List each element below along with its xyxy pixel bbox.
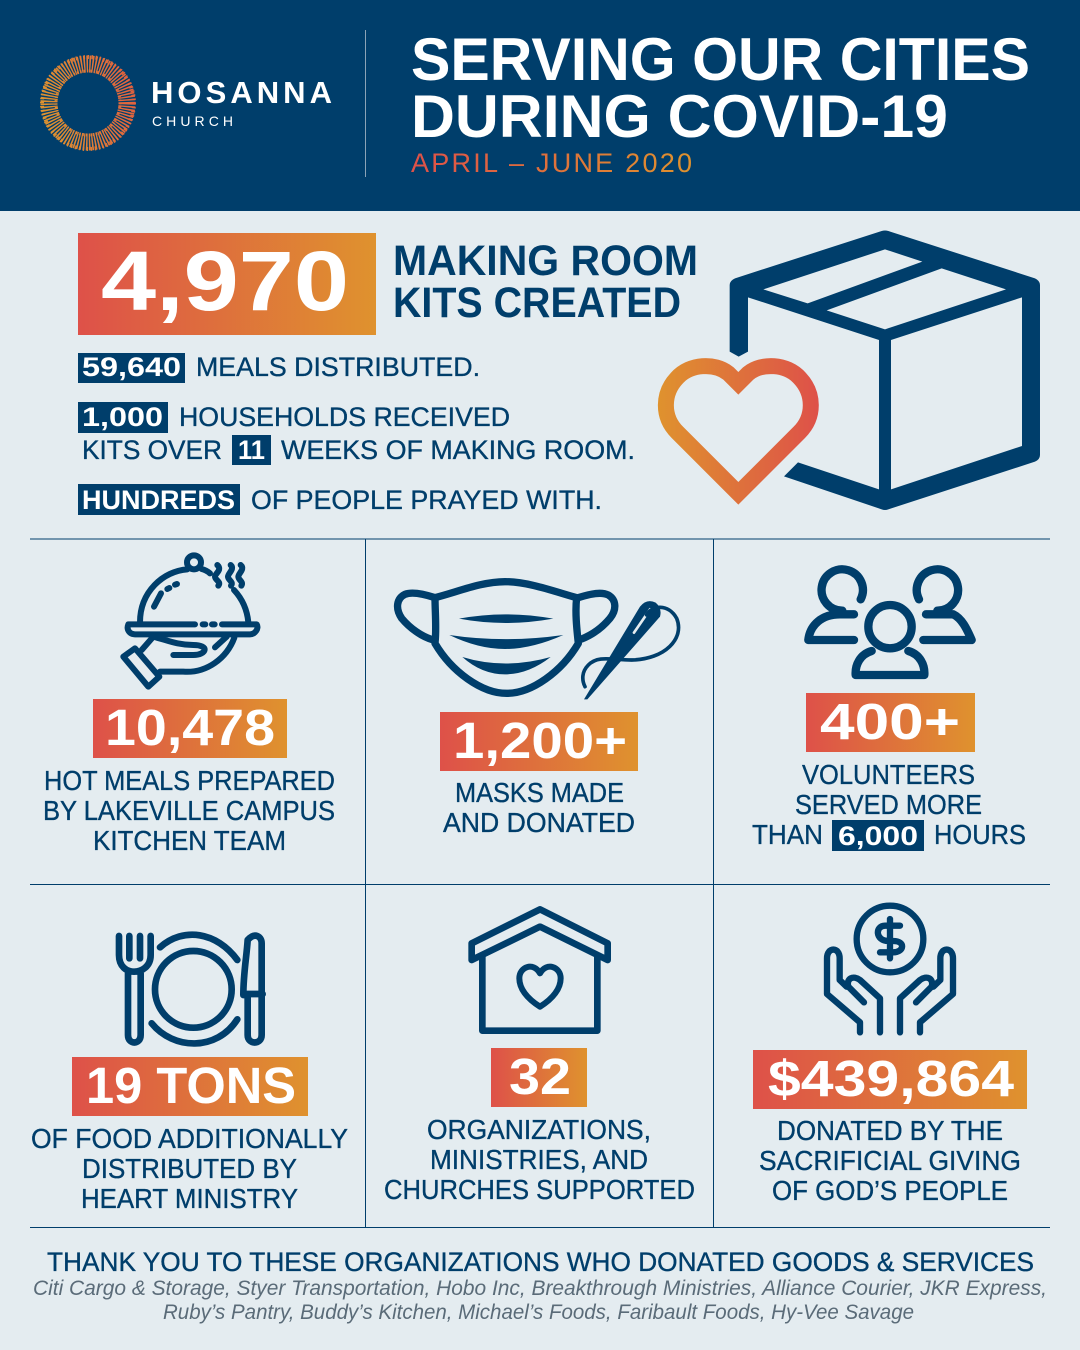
logo: Hosanna Church: HOSANNA	[151, 75, 332, 110]
text: donated by sacrificial giving: OF GOD’S PEOPLE	[772, 1175, 1008, 1206]
stat: 10,478: 10,478	[105, 699, 275, 756]
text: volunteers served hours: SERVED MORE	[795, 789, 982, 820]
heading: thank you: THANK YOU TO THESE ORGANIZATIONS WHO DONATED GOODS & SERVICES	[47, 1247, 1034, 1277]
grid lines	[30, 539, 1050, 1228]
text: households received kits	[78, 402, 635, 465]
title: DURING COVID-19	[411, 83, 948, 150]
panel: hot meals	[43, 555, 335, 856]
logo: Hosanna Church: CHURCH	[152, 113, 233, 129]
stat: 32	[491, 1048, 587, 1107]
text: meals distributed: MEALS DISTRIBUTED.	[196, 352, 480, 382]
text: volunteers served hours: THAN	[752, 819, 823, 850]
text: people prayed with: OF PEOPLE PRAYED WITH.	[251, 485, 602, 515]
text: organizations supported: MINISTRIES, AND	[430, 1144, 648, 1175]
text: donated by sacrificial giving: SACRIFICIAL GIVING	[759, 1145, 1021, 1176]
stat: 4,970: 4,970	[101, 234, 349, 328]
text: people prayed with: HUNDREDS	[82, 485, 235, 515]
text: households received kits: KITS OVER	[82, 435, 222, 465]
text: donor list	[33, 1277, 1047, 1324]
panel: organizations	[384, 909, 695, 1205]
stat: 4,970	[78, 233, 376, 335]
text: donated by sacrificial giving	[759, 1115, 1021, 1206]
text: organizations supported: ORGANIZATIONS,	[427, 1114, 651, 1145]
panel: making room kits	[78, 230, 1040, 515]
stat: 1,200+: 1,200+	[453, 712, 627, 769]
text: volunteers served hours: VOLUNTEERS	[802, 759, 975, 790]
text: volunteers served hours: 6,000	[838, 821, 918, 851]
text: donor list: Citi Cargo & Storage, Styer Transportation, Hobo Inc, Breakthrough Ministries, Alliance Courier, JKR Express,	[33, 1277, 1047, 1300]
text: masks made and donated: AND DONATED	[443, 807, 635, 838]
text: donated by sacrificial giving: DONATED BY THE	[777, 1115, 1003, 1146]
text: hot meals prepared: KITCHEN TEAM	[93, 825, 286, 856]
panel: donations	[753, 906, 1027, 1206]
icon: serving cloche and hand	[123, 555, 257, 687]
text: households received kits: WEEKS OF MAKING ROOM.	[281, 435, 635, 465]
title: APRIL – JUNE 2020	[411, 148, 692, 178]
text: organizations supported	[384, 1114, 695, 1205]
icon: mask and needle	[398, 582, 679, 699]
stat: 19 tons: 19 TONS	[86, 1057, 296, 1114]
text: hot meals prepared: BY LAKEVILLE CAMPUS	[43, 795, 335, 826]
text: donor list: Ruby’s Pantry, Buddy’s Kitchen, Michael’s Foods, Faribault Foods, Hy-Vee Savage	[163, 1301, 914, 1324]
icon: plate with fork and knife	[119, 935, 263, 1043]
text: hot meals prepared: HOT MEALS PREPARED	[44, 765, 335, 796]
title	[411, 26, 1030, 178]
text: people prayed with	[78, 484, 602, 515]
text: food distributed: DISTRIBUTED BY	[82, 1153, 297, 1184]
icon: three people	[808, 569, 972, 675]
text: volunteers served hours	[752, 759, 1026, 851]
title: SERVING OUR CITIES	[411, 26, 1030, 93]
text: food distributed: HEART MINISTRY	[81, 1183, 298, 1214]
icon: hands and dollar coin	[827, 906, 953, 1032]
footer: thank you	[33, 1247, 1047, 1324]
text: households received kits: 11	[238, 435, 265, 465]
panel: volunteers	[752, 569, 1026, 851]
panel: tons of food	[31, 935, 348, 1214]
text: meals distributed	[78, 352, 480, 383]
header band	[0, 0, 1080, 211]
text: organizations supported: CHURCHES SUPPORTED	[384, 1174, 695, 1205]
text: households received kits: HOUSEHOLDS RECEIVED	[179, 402, 510, 432]
panel: masks	[398, 582, 679, 838]
heading: making room kits created: KITS CREATED	[393, 279, 681, 327]
text: masks made and donated	[443, 777, 635, 838]
text: hot meals prepared	[43, 765, 335, 856]
stat: 400+	[806, 693, 975, 752]
stat: $439,864: $439,864	[768, 1050, 1015, 1107]
stat: 400+: 400+	[820, 693, 960, 750]
text: food distributed	[31, 1123, 348, 1214]
text: meals distributed: 59,640	[82, 352, 181, 382]
heading: making room kits created: MAKING ROOM	[393, 237, 698, 285]
heading: making room kits created	[393, 237, 698, 327]
icon: house with heart	[472, 909, 608, 1031]
logo: Hosanna Church	[42, 57, 332, 149]
text: volunteers served hours: HOURS	[934, 819, 1026, 850]
icon: box with heart	[666, 230, 1040, 510]
text: masks made and donated: MASKS MADE	[455, 777, 624, 808]
text: households received kits: 1,000	[82, 402, 163, 432]
text: food distributed: OF FOOD ADDITIONALLY	[31, 1123, 348, 1154]
stat: 32: 32	[509, 1048, 571, 1105]
logo ring	[42, 57, 134, 149]
